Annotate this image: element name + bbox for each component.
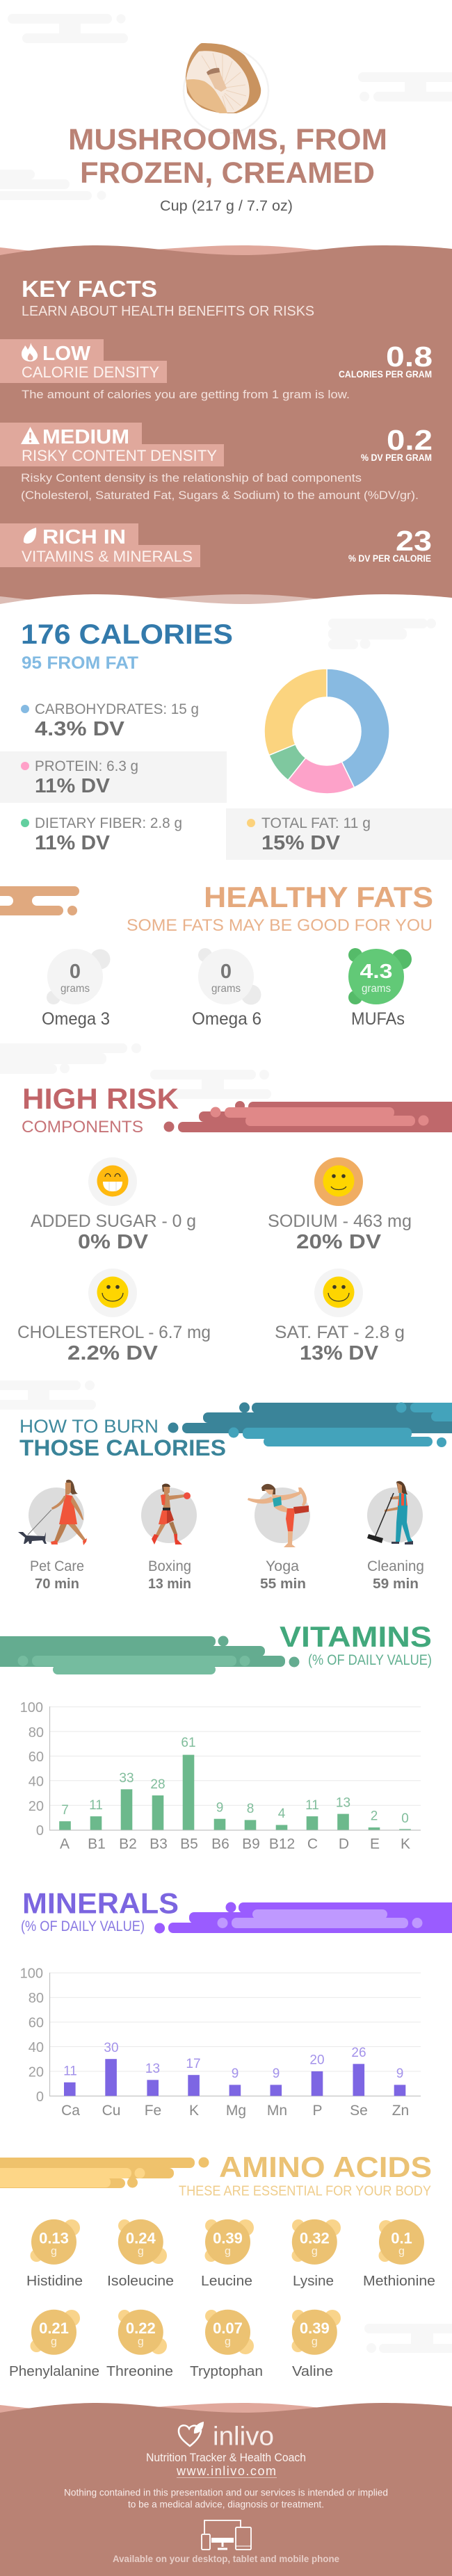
icon: mushroom photo — [184, 43, 268, 133]
stat: omega 3: Omega 3 — [42, 1009, 110, 1029]
activity: yoga: 55 min — [260, 1576, 306, 1592]
bar chart: minerals: 0 — [36, 2089, 44, 2105]
macro: dietary fiber: 11% DV — [35, 832, 111, 854]
risk: cholesterol — [17, 1269, 211, 1364]
risk: sodium — [268, 1157, 412, 1253]
bar chart: minerals: Se — [350, 2103, 368, 2119]
macro: carbohydrates: CARBOHYDRATES: 15 g — [35, 701, 199, 717]
bar chart: vitamins: 7 — [61, 1803, 69, 1818]
amino: leucine — [201, 2219, 254, 2289]
icon: smiling emoji — [323, 1165, 355, 1197]
bar chart: vitamins: B5 — [180, 1836, 198, 1852]
amino: leucine: g — [225, 2246, 231, 2258]
panel: healthy fats — [0, 881, 433, 1029]
stat: MUFAs: 4.3 — [360, 961, 392, 983]
activity: cleaning: Cleaning — [367, 1558, 424, 1574]
bar chart: minerals: 60 — [29, 2016, 44, 2031]
disclaimer — [64, 2487, 388, 2509]
icon: devices — [202, 2520, 251, 2550]
heading: vitamins: VITAMINS — [280, 1620, 432, 1653]
bar chart: vitamins: 11 — [89, 1798, 103, 1813]
subheading: THESE ARE ESSENTIAL FOR YOUR BODY — [179, 2183, 431, 2199]
activity: boxing: Boxing — [148, 1558, 191, 1574]
bar chart: minerals: Mn — [267, 2103, 287, 2119]
bar chart: minerals: 100 — [20, 1966, 43, 1981]
icon: warning triangle — [21, 427, 40, 444]
bar chart: vitamins: 40 — [29, 1774, 44, 1789]
activity: yoga — [248, 1484, 310, 1592]
amino: phenylalanine: 0.21 — [39, 2320, 69, 2337]
panel: key facts — [0, 245, 452, 613]
fact: low calorie density: CALORIES PER GRAM — [339, 369, 432, 380]
title — [68, 123, 387, 190]
subheading: from fat: 95 FROM FAT — [22, 653, 138, 673]
panel: calories — [0, 619, 452, 860]
bar chart: minerals: 17 — [186, 2057, 201, 2071]
fact: low calorie density: 0.8 — [386, 341, 433, 373]
amino: threonine: g — [138, 2335, 144, 2347]
risk: added sugar — [31, 1157, 196, 1253]
availability note: Available on your desktop, tablet and mobile phone — [113, 2553, 339, 2564]
banner: yellow cloud — [0, 2158, 209, 2188]
macro: total fat — [226, 808, 452, 860]
bar chart: vitamins: B9 — [242, 1836, 260, 1852]
bar chart: vitamins: 28 — [150, 1777, 166, 1792]
amino: tryptophan: Tryptophan — [190, 2364, 263, 2379]
bar chart: minerals: P — [312, 2103, 323, 2119]
fact: medium risky content density — [0, 423, 433, 502]
activity: cleaning: 59 min — [373, 1576, 419, 1592]
heading: those calories: THOSE CALORIES — [19, 1435, 226, 1460]
fact: medium risky content density: (Cholesterol, Saturated Fat, Sugars & Sodium) to the amount (%DV/gr). — [21, 489, 419, 502]
bar chart: vitamins: 11 — [305, 1798, 319, 1813]
fact: rich in vitamins and minerals — [0, 523, 432, 567]
amino: valine — [292, 2310, 341, 2379]
macro: carbohydrates — [21, 701, 199, 740]
bar chart: vitamins: 20 — [29, 1799, 44, 1814]
bar chart: minerals: Mg — [226, 2103, 246, 2119]
heading: calories: 176 CALORIES — [21, 619, 233, 650]
macro: carbohydrates: 4.3% DV — [35, 718, 125, 740]
activity: pet care: 70 min — [35, 1576, 79, 1592]
bar chart: vitamins: D — [339, 1836, 349, 1852]
fact: medium risky content density: RISKY CONTENT DENSITY — [22, 447, 217, 464]
amino: phenylalanine — [9, 2310, 99, 2379]
amino: methionine — [363, 2219, 435, 2289]
bar chart: vitamins: B6 — [211, 1836, 229, 1852]
amino: valine: Valine — [292, 2364, 333, 2379]
bar chart: minerals: 9 — [273, 2066, 280, 2081]
risk: added sugar: 0% DV — [78, 1231, 149, 1253]
bar chart: minerals: Cu — [102, 2103, 120, 2119]
heading: healthy fats: HEALTHY FATS — [204, 881, 433, 913]
risk: sodium: SODIUM - 463 mg — [268, 1212, 412, 1231]
amino: lysine — [292, 2219, 341, 2289]
fact: low calorie density — [0, 339, 433, 401]
risk: saturated fat: SAT. FAT - 2.8 g — [275, 1323, 405, 1342]
donut chart — [264, 669, 389, 794]
bar chart: vitamins: 33 — [119, 1771, 134, 1786]
bar chart: vitamins: 2 — [371, 1809, 378, 1824]
disclaimer: to be a medical advice, diagnosis or treatment. — [128, 2498, 324, 2509]
bar chart: vitamins: 61 — [181, 1736, 196, 1750]
logo: inlivo: inlivo — [213, 2422, 274, 2451]
risk: sodium: 20% DV — [296, 1231, 382, 1253]
bar chart: vitamins: 4 — [278, 1807, 286, 1821]
activity: cleaning — [367, 1481, 424, 1592]
stat: omega 6: grams — [211, 983, 241, 995]
serving size: Cup (217 g / 7.7 oz) — [160, 198, 293, 214]
activity: pet care: Pet Care — [30, 1558, 84, 1574]
fact: medium risky content density: MEDIUM — [42, 426, 129, 448]
macro: protein: PROTEIN: 6.3 g — [35, 758, 138, 774]
risk: saturated fat — [275, 1269, 405, 1364]
subheading: percent daily value: (% OF DAILY VALUE) — [308, 1652, 432, 1668]
amino: methionine: Methionine — [363, 2274, 435, 2289]
icon: boxer — [152, 1484, 191, 1544]
macro: protein — [0, 751, 227, 803]
bar chart: vitamins: B3 — [150, 1836, 168, 1852]
amino: isoleucine: 0.24 — [126, 2229, 156, 2247]
title: FROZEN, CREAMED — [80, 156, 375, 190]
icon: yoga pose — [248, 1484, 309, 1547]
fact: low calorie density: CALORIE DENSITY — [22, 364, 159, 381]
amino: lysine: g — [312, 2246, 318, 2258]
amino: histidine: Histidine — [26, 2274, 83, 2289]
bar chart: minerals: 11 — [63, 2064, 77, 2078]
bar chart: vitamins: E — [370, 1836, 380, 1852]
bar chart: vitamins: B1 — [88, 1836, 106, 1852]
tagline: Nutrition Tracker & Health Coach — [146, 2451, 306, 2464]
icon: woman walking dog — [18, 1480, 87, 1545]
heading: high risk: HIGH RISK — [22, 1082, 179, 1115]
subheading: components: COMPONENTS — [22, 1118, 143, 1136]
amino: phenylalanine: Phenylalanine — [9, 2364, 99, 2379]
banner: red cloud — [164, 1101, 452, 1132]
bar chart: vitamins: 80 — [29, 1725, 44, 1741]
fact: rich in vitamins and minerals: 23 — [396, 525, 432, 557]
macro: dietary fiber — [21, 815, 182, 854]
bar chart: vitamins: 100 — [20, 1700, 43, 1715]
bar chart: minerals: 26 — [351, 2046, 366, 2060]
amino: lysine: Lysine — [293, 2274, 334, 2289]
banner: purple cloud — [154, 1902, 452, 1934]
bar chart: minerals: 30 — [104, 2041, 119, 2055]
icon: leaf — [24, 528, 36, 544]
amino: tryptophan — [190, 2310, 263, 2379]
bar chart: minerals: Fe — [145, 2103, 161, 2119]
subheading: SOME FATS MAY BE GOOD FOR YOU — [127, 916, 433, 935]
panel: vitamins — [0, 1620, 432, 1852]
bar chart: vitamins: 13 — [336, 1796, 350, 1810]
bar chart: vitamins: C — [307, 1836, 318, 1852]
bar chart: vitamins: 0 — [401, 1811, 409, 1826]
bar chart: minerals: 20 — [29, 2064, 44, 2080]
amino: methionine: 0.1 — [391, 2229, 412, 2247]
fact: rich in vitamins and minerals: % DV PER CALORIE — [348, 553, 431, 564]
amino: methionine: g — [398, 2246, 405, 2258]
heading: amino acids: AMINO ACIDS — [219, 2151, 432, 2183]
icon: grinning emoji — [97, 1165, 128, 1197]
bar chart: vitamins: 8 — [247, 1802, 254, 1816]
amino: threonine: Threonine — [106, 2364, 173, 2379]
logo: inlivo — [179, 2422, 274, 2451]
amino: leucine: 0.39 — [213, 2229, 243, 2247]
fact: low calorie density: The amount of calories you are getting from 1 gram is low. — [22, 388, 350, 401]
amino: isoleucine: g — [138, 2246, 144, 2258]
bar chart: vitamins: 9 — [216, 1800, 223, 1816]
disclaimer: Nothing contained in this presentation and our services is intended or implied — [64, 2487, 388, 2498]
bar chart: minerals: 9 — [232, 2066, 239, 2081]
bar chart: vitamins: B12 — [269, 1836, 295, 1852]
activity: boxing — [141, 1484, 197, 1592]
panel: high risk components — [17, 1082, 452, 1364]
heading: minerals: MINERALS — [22, 1886, 179, 1919]
bar chart: minerals: 20 — [309, 2053, 325, 2067]
fact: rich in vitamins and minerals: RICH IN — [42, 526, 126, 548]
amino: tryptophan: 0.07 — [213, 2320, 243, 2337]
macro: total fat: 15% DV — [261, 832, 341, 854]
banner: green cloud — [0, 1636, 299, 1674]
bar chart: minerals: K — [189, 2103, 199, 2119]
activity: boxing: 13 min — [148, 1576, 191, 1592]
amino: threonine — [106, 2310, 173, 2379]
bar chart: minerals: 80 — [29, 1991, 44, 2006]
amino: lysine: 0.32 — [300, 2229, 330, 2247]
bar chart: vitamins: 60 — [29, 1750, 44, 1765]
subheading: LEARN ABOUT HEALTH BENEFITS OR RISKS — [22, 304, 314, 319]
amino: histidine: 0.13 — [39, 2229, 69, 2247]
amino: valine: g — [312, 2335, 318, 2347]
amino: isoleucine — [107, 2219, 174, 2289]
bar chart: vitamins: 0 — [36, 1823, 44, 1839]
icon: person sweeping — [367, 1481, 413, 1544]
heading: how to burn: HOW TO BURN — [19, 1416, 159, 1437]
fact: medium risky content density: 0.2 — [387, 424, 433, 456]
panel: how to burn those calories — [18, 1403, 452, 1592]
amino: tryptophan: g — [225, 2335, 231, 2347]
stat: omega 6: Omega 6 — [192, 1009, 261, 1029]
bar chart: vitamins — [20, 1700, 421, 1852]
bar chart: minerals: 13 — [145, 2062, 160, 2076]
amino: isoleucine: Isoleucine — [107, 2274, 174, 2289]
fact: low calorie density: LOW — [42, 343, 91, 365]
stat: MUFAs: MUFAs — [351, 1009, 405, 1029]
icon: flame — [22, 343, 38, 361]
amino: phenylalanine: g — [51, 2335, 57, 2347]
panel: minerals — [20, 1886, 452, 2119]
amino: threonine: 0.22 — [126, 2320, 156, 2337]
amino: leucine: Leucine — [201, 2274, 252, 2289]
website link: www.inlivo.com — [176, 2464, 276, 2478]
bar chart: minerals: Ca — [61, 2103, 80, 2119]
stat: omega 3 — [42, 949, 110, 1029]
bar chart: minerals: 40 — [29, 2040, 44, 2055]
heading: key facts: KEY FACTS — [22, 276, 157, 302]
stat: MUFAs: grams — [362, 983, 391, 995]
icon: smiling emoji — [323, 1276, 355, 1308]
bar chart: minerals — [20, 1966, 421, 2119]
risk: cholesterol: CHOLESTEROL - 6.7 mg — [17, 1323, 211, 1342]
panel: amino acids — [0, 2151, 435, 2379]
banner: teal cloud — [168, 1403, 452, 1447]
bar chart: vitamins: K — [401, 1836, 410, 1852]
bar chart: minerals: Zn — [392, 2103, 409, 2119]
stat: omega 3: grams — [60, 983, 90, 995]
risk: added sugar: ADDED SUGAR - 0 g — [31, 1212, 196, 1231]
stat: omega 6: 0 — [220, 961, 232, 983]
bar chart: minerals: 9 — [396, 2066, 403, 2081]
macro: protein: 11% DV — [35, 775, 111, 797]
amino: histidine — [26, 2219, 83, 2289]
activity: yoga: Yoga — [266, 1558, 299, 1574]
fact: medium risky content density: Risky Content density is the relationship of bad components — [21, 471, 362, 484]
stat: omega 3: 0 — [70, 961, 81, 983]
stat: MUFAs — [348, 948, 412, 1029]
banner: orange cloud — [0, 886, 79, 915]
risk: cholesterol: 2.2% DV — [67, 1342, 159, 1364]
fact: medium risky content density: % DV PER GRAM — [361, 453, 432, 463]
subheading: percent daily value: (% OF DAILY VALUE) — [21, 1918, 145, 1934]
macro: dietary fiber: DIETARY FIBER: 2.8 g — [35, 815, 182, 831]
bar chart: vitamins: A — [60, 1836, 70, 1852]
activity: pet care — [18, 1480, 87, 1592]
title: MUSHROOMS, FROM — [68, 123, 387, 156]
risk: saturated fat: 13% DV — [300, 1342, 379, 1364]
icon: smiling emoji — [97, 1276, 128, 1308]
bar chart: vitamins: B2 — [119, 1836, 137, 1852]
macro: total fat: TOTAL FAT: 11 g — [261, 815, 371, 831]
panel: footer — [0, 2403, 452, 2576]
amino: valine: 0.39 — [300, 2320, 330, 2337]
fact: rich in vitamins and minerals: VITAMINS & MINERALS — [22, 548, 193, 565]
amino: histidine: g — [51, 2246, 57, 2258]
stat: omega 6 — [192, 948, 261, 1029]
